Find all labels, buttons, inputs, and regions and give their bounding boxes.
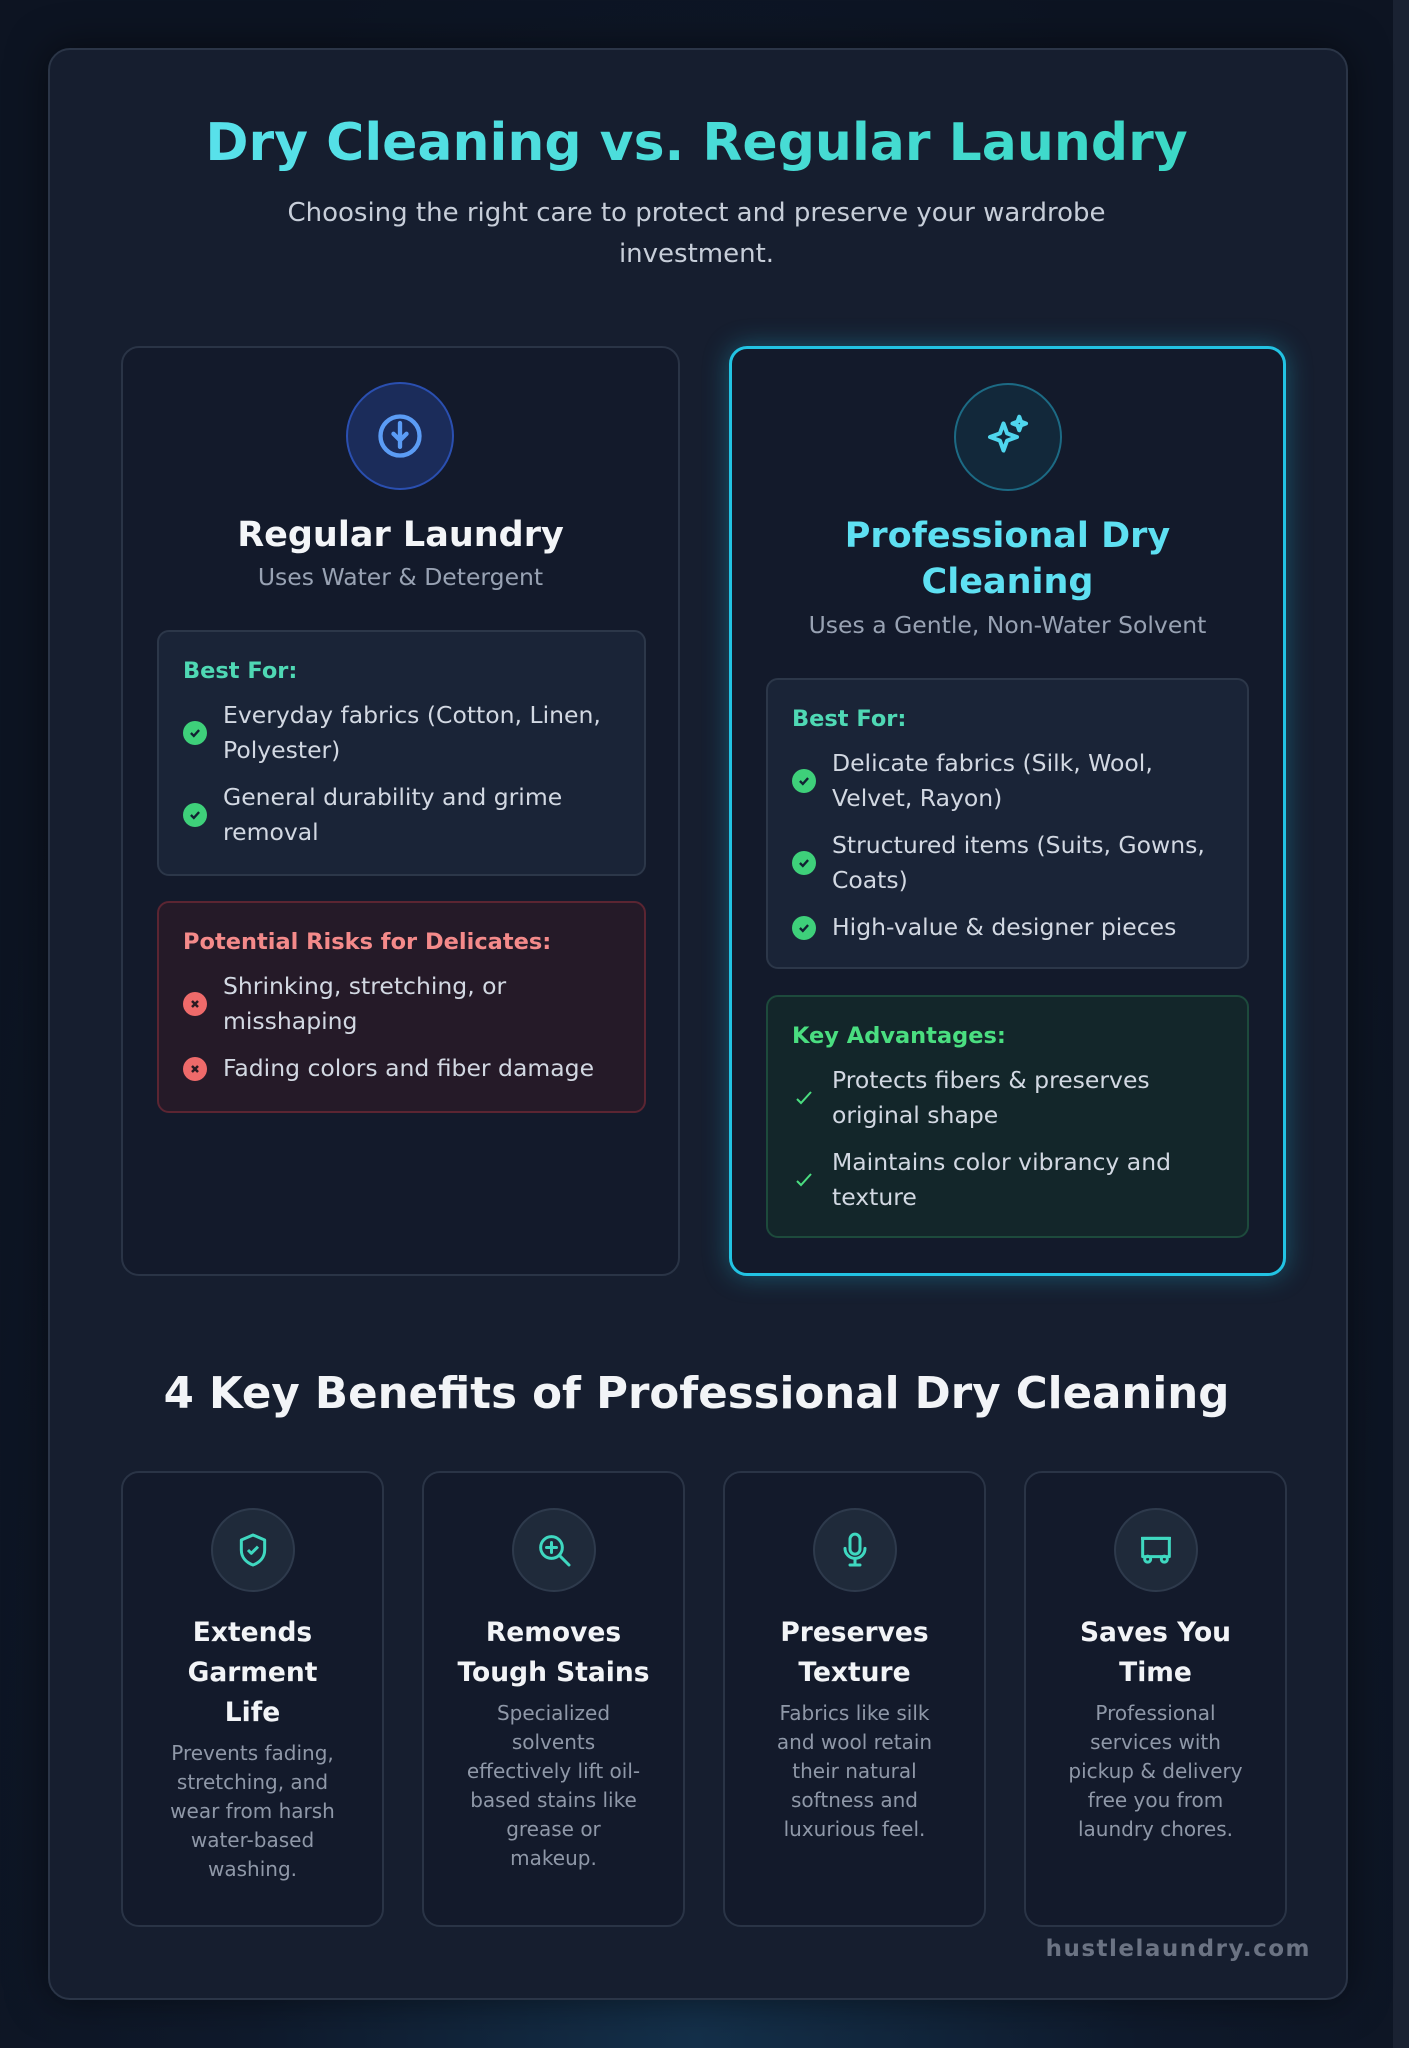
title: Dry Cleaning vs. Regular Laundry bbox=[205, 113, 1188, 173]
text: Life bbox=[225, 1697, 280, 1728]
box: risks bbox=[157, 901, 646, 1113]
heading: Regular Laundry bbox=[237, 515, 564, 555]
heading bbox=[845, 516, 1170, 602]
text: Saves You bbox=[1080, 1617, 1231, 1648]
text: Specialized solvents effectively lift oil-based stains like grease or makeup. bbox=[467, 1701, 640, 1870]
icon: magnifier bbox=[512, 1508, 596, 1592]
icon: sparkles bbox=[954, 383, 1062, 491]
panel: regular laundry bbox=[121, 346, 680, 1276]
text: Fabrics like silk and wool retain their natural softness and luxurious feel. bbox=[777, 1701, 932, 1841]
text: Texture bbox=[798, 1657, 911, 1688]
text: Preserves bbox=[780, 1617, 929, 1648]
item: General durability and grime removal bbox=[223, 783, 562, 846]
item: Maintains color vibrancy and texture bbox=[832, 1148, 1171, 1211]
box: key advantages: Key Advantages: bbox=[792, 1023, 1006, 1049]
text: Prevents fading, stretching, and wear from harsh water-based washing. bbox=[170, 1741, 335, 1881]
benefit card: removes tough stains bbox=[422, 1471, 685, 1927]
icon: shield bbox=[211, 1508, 295, 1592]
box: best for: Best For: bbox=[183, 658, 297, 684]
text bbox=[170, 1617, 335, 1881]
text: Extends bbox=[193, 1617, 312, 1648]
benefit card: preserves texture bbox=[723, 1471, 986, 1927]
text: Tough Stains bbox=[457, 1657, 650, 1688]
item: Shrinking, stretching, or misshaping bbox=[223, 972, 506, 1035]
box: risks: Potential Risks for Delicates: bbox=[183, 929, 551, 955]
text bbox=[457, 1617, 650, 1870]
footer brand: hustlelaundry.com bbox=[1046, 1936, 1311, 1962]
heading: Professional Dry bbox=[845, 516, 1170, 556]
item: Protects fibers & preserves original shape bbox=[832, 1066, 1150, 1129]
subheading: Uses a Gentle, Non-Water Solvent bbox=[809, 611, 1206, 639]
icon: water/laundry bbox=[346, 382, 454, 490]
text bbox=[777, 1617, 932, 1841]
box: best for bbox=[766, 678, 1249, 969]
box: best for: Best For: bbox=[792, 706, 906, 732]
item: Everyday fabrics (Cotton, Linen, Polyester) bbox=[223, 701, 601, 764]
subtitle: Choosing the right care to protect and preserve your wardrobe investment. bbox=[287, 198, 1106, 269]
subheading: Uses Water & Detergent bbox=[258, 563, 543, 591]
item: Fading colors and fiber damage bbox=[223, 1054, 594, 1082]
benefit card: saves you time bbox=[1024, 1471, 1287, 1927]
panel: professional dry cleaning bbox=[729, 346, 1286, 1276]
icon: van bbox=[1114, 1508, 1198, 1592]
text: Garment bbox=[188, 1657, 317, 1688]
section heading: 4 Key Benefits of Professional Dry Cleaning bbox=[164, 1369, 1229, 1419]
text: Professional services with pickup & delivery free you from laundry chores. bbox=[1068, 1701, 1243, 1841]
item: High-value & designer pieces bbox=[832, 913, 1176, 941]
box: key advantages bbox=[766, 995, 1249, 1238]
item: Delicate fabrics (Silk, Wool, Velvet, Rayon) bbox=[832, 749, 1153, 812]
icon: microphone bbox=[813, 1508, 897, 1592]
item: Structured items (Suits, Gowns, Coats) bbox=[832, 831, 1205, 894]
text: Time bbox=[1119, 1657, 1192, 1688]
heading: Cleaning bbox=[922, 562, 1093, 602]
benefit card: extends garment life bbox=[121, 1471, 384, 1927]
text: Removes bbox=[486, 1617, 621, 1648]
text bbox=[1068, 1617, 1243, 1841]
box: best for bbox=[157, 630, 646, 876]
